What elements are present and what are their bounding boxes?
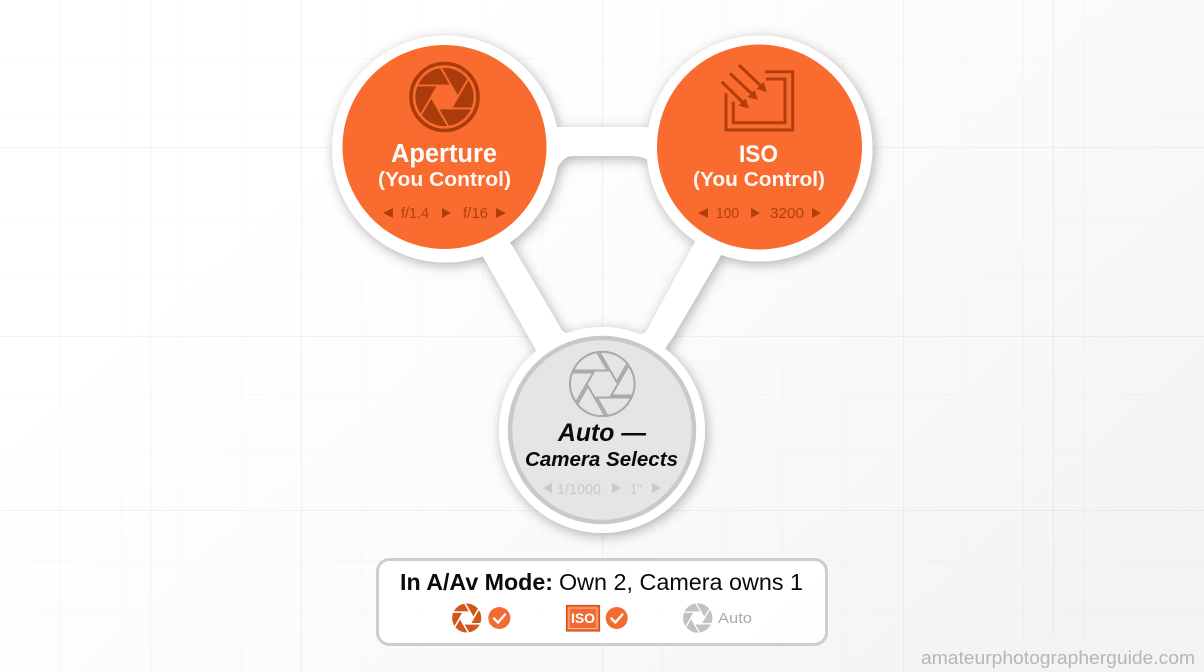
shutter speed range scale xyxy=(543,481,661,498)
heading: auto: Auto — xyxy=(557,419,647,447)
legend title: In A/Av Mode: xyxy=(400,569,553,595)
shutter speed range scale: 1/1000 xyxy=(557,481,601,498)
panel: auto shutter circle xyxy=(510,338,694,522)
icon: grey outline shutter xyxy=(560,343,644,425)
ISO range scale xyxy=(698,206,821,222)
subheading: you control: (You Control) xyxy=(693,168,825,191)
legend panel xyxy=(378,560,826,644)
panel: aperture circle xyxy=(342,45,546,249)
ISO range scale: 100 xyxy=(716,206,739,222)
shutter speed range scale: 1" xyxy=(630,481,642,498)
legend check: ISO xyxy=(606,607,628,629)
legend icon: ISO: ISO xyxy=(571,610,595,626)
legend label: auto: Auto xyxy=(718,610,752,627)
ISO range scale: 3200 xyxy=(770,206,804,222)
legend icon: aperture xyxy=(446,598,487,638)
aperture range scale: f/1.4 xyxy=(401,206,429,222)
heading: ISO: ISO xyxy=(739,141,778,168)
icon: aperture shutter xyxy=(405,58,484,136)
panel: ISO circle xyxy=(657,44,862,250)
heading: Aperture: Aperture xyxy=(391,140,497,168)
legend check: aperture xyxy=(488,607,510,629)
aperture range scale: f/16 xyxy=(463,206,488,222)
subheading: you control: (You Control) xyxy=(378,168,511,191)
subheading: camera selects: Camera Selects xyxy=(525,448,678,471)
white connector frame joining the three circles xyxy=(332,36,872,533)
legend title: Own 2, Camera owns 1 xyxy=(559,569,803,595)
legend icon: ISO xyxy=(566,606,600,631)
watermark: amateurphotographerguide.com xyxy=(921,647,1195,668)
legend icon: auto shutter xyxy=(677,598,718,638)
aperture range scale xyxy=(383,206,506,222)
icon: ISO sensor with light rays xyxy=(722,65,793,130)
